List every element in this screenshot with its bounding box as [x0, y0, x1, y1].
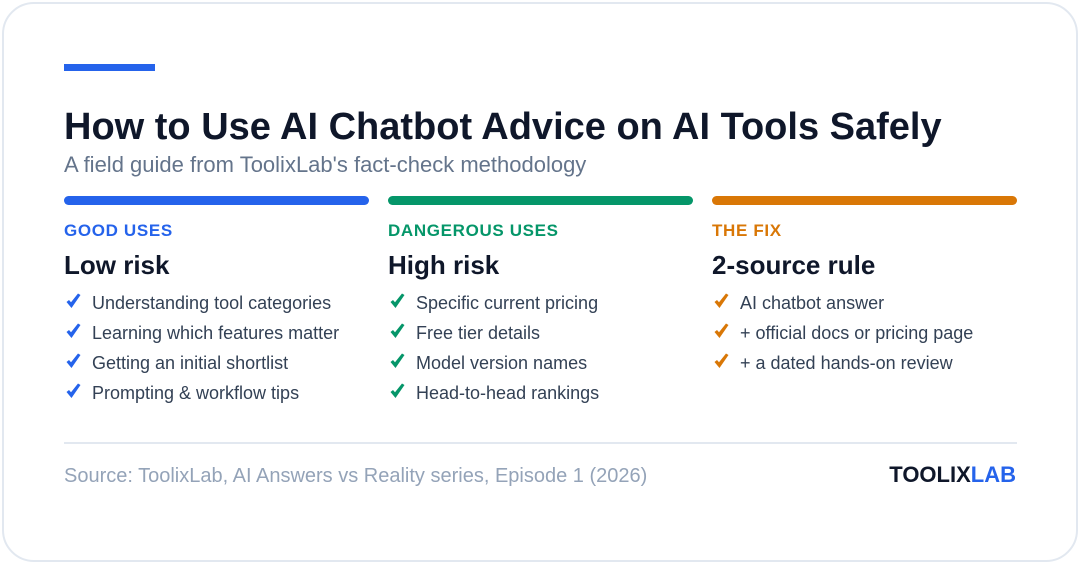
subtitle: A field guide from ToolixLab's fact-check methodology [64, 152, 586, 177]
item: specific current pricing: Specific current pricing [416, 293, 598, 313]
title: How to Use AI Chatbot Advice on AI Tools Safely [64, 106, 942, 148]
panel: dangerous uses: High risk [388, 250, 499, 280]
panel: the fix [712, 196, 1017, 373]
source line: Source: ToolixLab, AI Answers vs Reality series, Episode 1 (2026) [64, 465, 647, 487]
panel: dangerous uses: DANGEROUS USES [388, 221, 559, 240]
item: getting an initial shortlist: Getting an initial shortlist [92, 353, 288, 373]
panel: good uses: Low risk [64, 250, 169, 280]
panel: dangerous uses [388, 196, 693, 403]
item: dated hands-on review: + a dated hands-on review [740, 353, 953, 373]
accent bar [64, 64, 155, 71]
item: AI chatbot answer: AI chatbot answer [740, 293, 884, 313]
item: prompting and workflow tips: Prompting & workflow tips [92, 383, 299, 403]
brand logo: TOOLIXLAB [889, 462, 1016, 487]
panel: the fix: THE FIX [712, 221, 782, 240]
item: understanding tool categories: Understanding tool categories [92, 293, 331, 313]
panel: the fix: 2-source rule [712, 250, 875, 280]
item: free tier details: Free tier details [416, 323, 540, 343]
item: head-to-head rankings: Head-to-head rankings [416, 383, 599, 403]
item: learning which features matter: Learning which features matter [92, 323, 339, 343]
panel: good uses [64, 196, 369, 403]
item: official docs or pricing page: + official docs or pricing page [740, 323, 973, 343]
item: model version names: Model version names [416, 353, 587, 373]
panel: good uses: GOOD USES [64, 221, 173, 240]
